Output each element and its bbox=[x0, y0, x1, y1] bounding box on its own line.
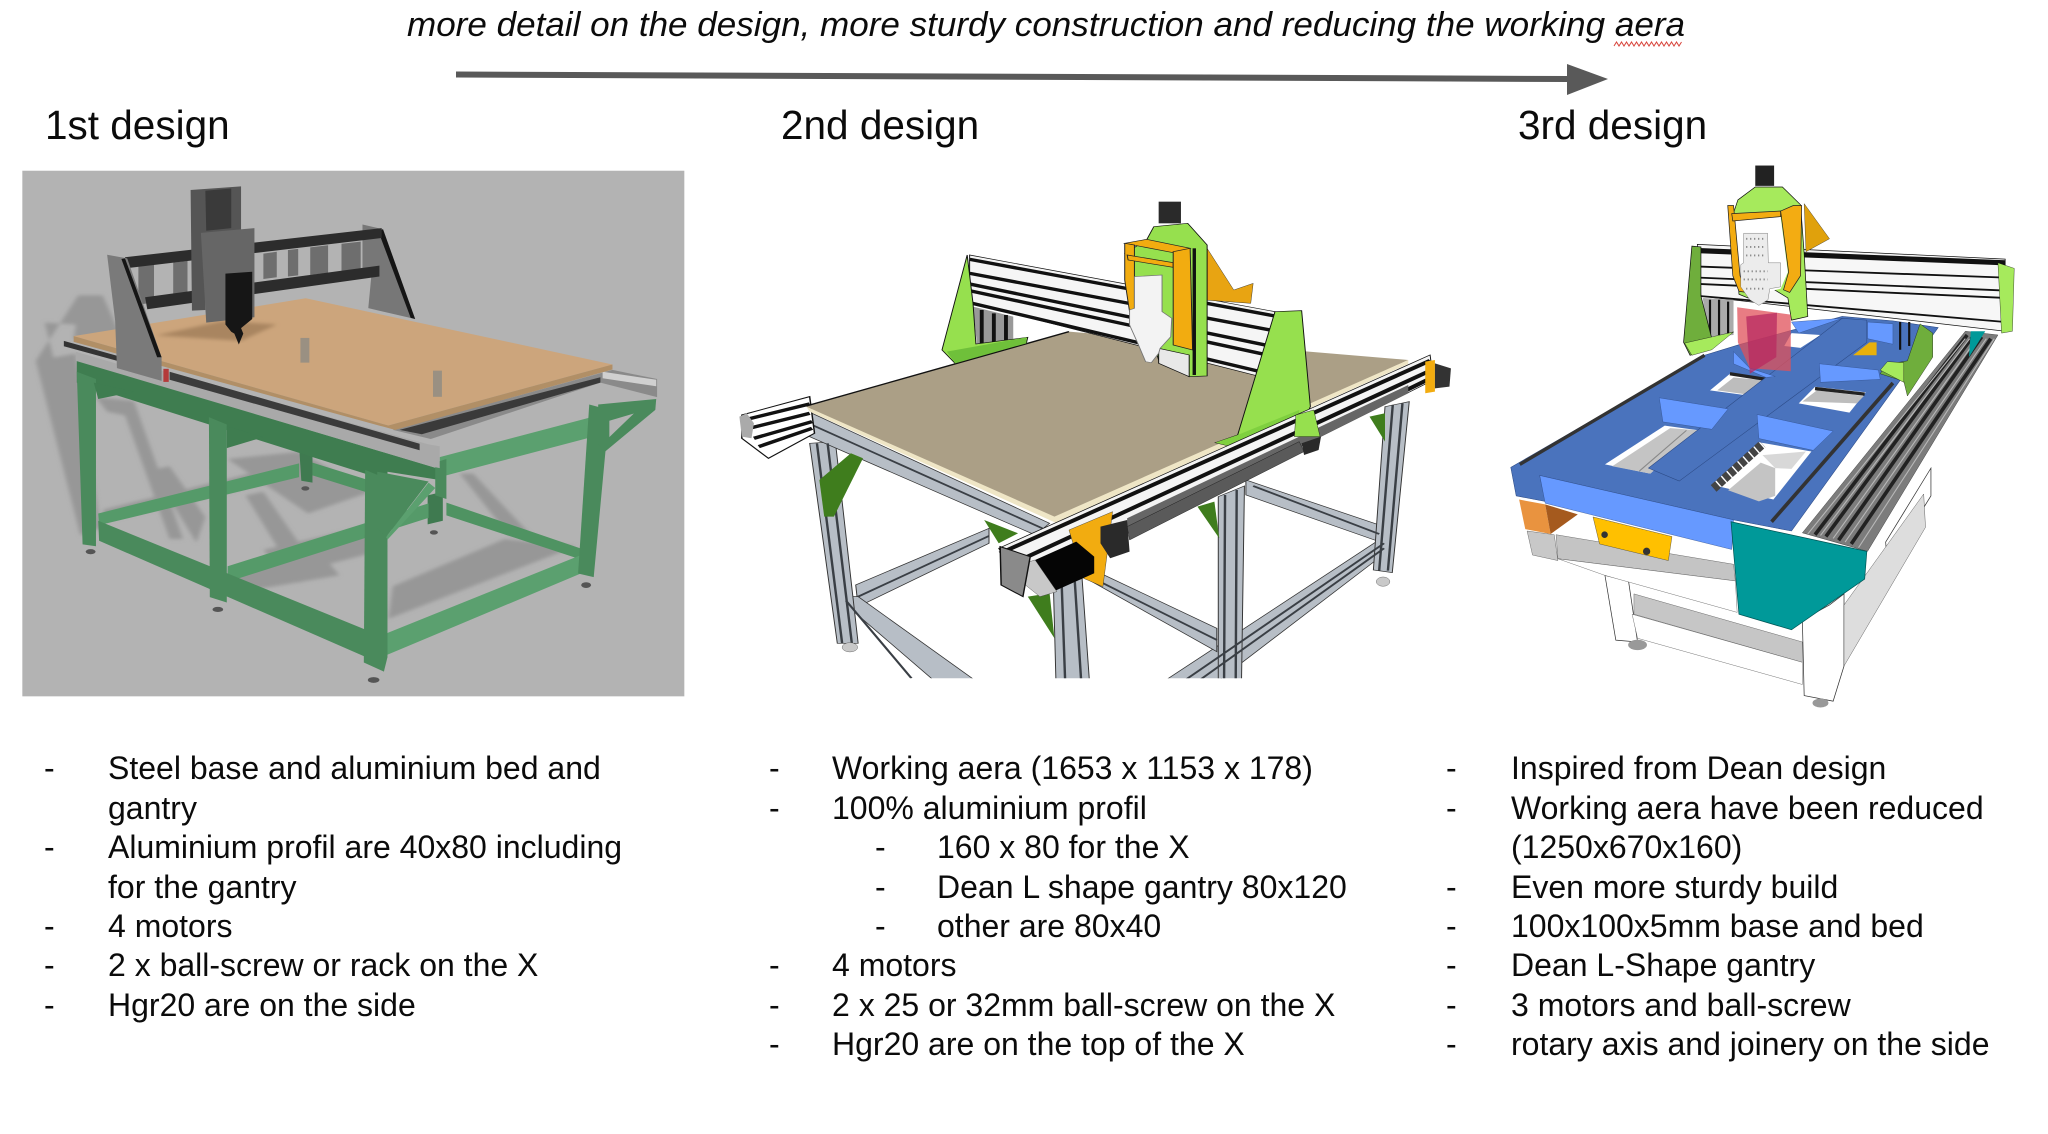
text block: 2nd design specs: - bbox=[769, 790, 780, 826]
Z axis carriage bbox=[201, 228, 254, 323]
X ball screw bbox=[1127, 442, 1304, 540]
Z axis orange back bbox=[1804, 204, 1830, 252]
aluminium legs and cross beams bbox=[810, 402, 1409, 680]
bed clamps bbox=[300, 338, 442, 397]
spindle bbox=[1130, 275, 1172, 363]
front X rail bbox=[998, 354, 1432, 561]
panel: 1st design render bbox=[22, 171, 684, 696]
text block: 2nd design specs: - bbox=[769, 947, 780, 983]
text block: 3rd design specs: - bbox=[1446, 908, 1457, 944]
panel: 3rd design model bbox=[1511, 166, 2014, 707]
text block: 2nd design specs bbox=[769, 750, 1347, 1062]
text block: 2nd design specs: - bbox=[769, 1026, 780, 1062]
arrow: design progression bbox=[456, 64, 1608, 95]
text block: 2nd design specs: 2 x 25 or 32mm ball-screw on the X bbox=[832, 987, 1335, 1023]
steel base: green frame bbox=[77, 360, 656, 672]
text block: 1st design specs bbox=[44, 750, 622, 1023]
text block: 2nd design specs: - bbox=[769, 987, 780, 1023]
left gantry plate bbox=[1684, 246, 1734, 355]
Z motor bbox=[1755, 166, 1774, 186]
render background bbox=[22, 171, 684, 696]
spindle bbox=[1741, 233, 1781, 305]
green corner braces bbox=[819, 413, 1385, 638]
text block: 1st design specs: - bbox=[44, 947, 55, 983]
text block: 3rd design specs: - bbox=[1446, 987, 1457, 1023]
Z axis orange back bbox=[1205, 248, 1253, 303]
text block: 3rd design specs: - bbox=[1446, 750, 1457, 786]
panel: 2nd design model bbox=[739, 202, 1451, 680]
profile slot lines bbox=[812, 403, 1402, 680]
text block: 3rd design specs: Dean L-Shape gantry bbox=[1511, 947, 1815, 983]
text block: 3rd design specs: - bbox=[1446, 790, 1457, 826]
bearing block bbox=[1100, 520, 1130, 558]
text block: 2nd design specs: 4 motors bbox=[832, 947, 956, 983]
Z axis back plate bbox=[191, 186, 241, 311]
Z motor bbox=[1159, 202, 1181, 223]
left end extrusion bbox=[742, 397, 815, 458]
Z axis lower rails bbox=[1159, 348, 1189, 377]
gantry right plate bbox=[362, 225, 415, 319]
far teal plate bbox=[1969, 331, 1985, 357]
text block: 1st design specs: - bbox=[44, 750, 55, 786]
text block: 3rd design specs: (1250x670x160) bbox=[1511, 829, 1742, 865]
yellow motor mount bbox=[1593, 517, 1672, 561]
text block: 2nd design specs: Hgr20 are on the top of the X bbox=[832, 1026, 1245, 1062]
text block: 2nd design specs: Dean L shape gantry 80x120 bbox=[937, 869, 1347, 905]
feet bbox=[1628, 640, 1828, 707]
aluminium side extrusion block bbox=[1802, 331, 1998, 551]
adjustable feet bbox=[86, 486, 591, 683]
gantry rear rail bbox=[970, 255, 1275, 377]
text block: 2nd design specs: 100% aluminium profil bbox=[832, 790, 1147, 826]
spindle dots bbox=[1744, 239, 1768, 289]
text block: 1st design specs: 2 x ball-screw or rack on the X bbox=[108, 947, 538, 983]
rotary axis translucent red zone bbox=[1737, 307, 1791, 374]
text block: 2nd design specs: other are 80x40 bbox=[937, 908, 1161, 944]
text block: 1st design specs: - bbox=[44, 908, 55, 944]
Z axis orange carriage bbox=[1125, 239, 1193, 350]
front orange motor mount bbox=[1069, 512, 1113, 587]
frame openings bbox=[1605, 333, 1877, 501]
heading: 3rd design: 3rd design bbox=[1518, 102, 1707, 148]
gantry rails bbox=[125, 228, 382, 268]
cast shadows bbox=[36, 295, 576, 619]
central blue beam bbox=[1648, 318, 1867, 481]
heading: 2nd design: 2nd design bbox=[781, 102, 979, 148]
text block: 2nd design specs: - bbox=[769, 750, 780, 786]
light blue faces bbox=[1540, 318, 1893, 549]
text block: 2nd design specs: - bbox=[875, 829, 886, 865]
text block: 3rd design specs: - bbox=[1446, 1026, 1457, 1062]
Z axis green body bbox=[1734, 187, 1808, 320]
text block: 3rd design specs: Inspired from Dean design bbox=[1511, 750, 1886, 786]
Z axis green plate bbox=[1125, 223, 1207, 377]
orange corner block bbox=[1519, 500, 1551, 534]
gantry left plate bbox=[107, 255, 162, 381]
text block: 3rd design specs: - bbox=[1446, 869, 1457, 905]
right X motor mount bbox=[1425, 360, 1435, 393]
linear rails on frame bbox=[1520, 355, 1705, 464]
text block: 1st design specs: - bbox=[44, 987, 55, 1023]
Z axis opening bbox=[1734, 217, 1788, 296]
text block: 1st design specs: Aluminium profil are 40x80 including bbox=[108, 829, 622, 865]
text block: 2nd design specs: - bbox=[875, 908, 886, 944]
Z axis orange carriage bbox=[1728, 205, 1802, 292]
text block: 3rd design specs bbox=[1446, 750, 1989, 1062]
wooden bed top bbox=[74, 298, 612, 426]
gantry foot clamp bbox=[1294, 410, 1320, 437]
side linear rail bbox=[64, 341, 120, 362]
text block: 3rd design specs: - bbox=[1446, 947, 1457, 983]
heading: 1st design: 1st design bbox=[45, 102, 230, 148]
rotary joinery teal plate bbox=[1731, 522, 1867, 630]
text block: 2nd design specs: 160 x 80 for the X bbox=[937, 829, 1190, 865]
text block: 2nd design specs: Working aera (1653 x 1153 x 178) bbox=[832, 750, 1313, 786]
white base legs and lower frame bbox=[1605, 468, 1931, 701]
bed board bbox=[806, 332, 1408, 522]
front X motor bbox=[1035, 542, 1094, 591]
right gantry plate bbox=[1215, 311, 1310, 451]
text block: 1st design specs: gantry bbox=[108, 790, 197, 826]
aluminium bed extrusions bbox=[76, 352, 440, 468]
left gantry plate bbox=[942, 255, 1028, 363]
text block: 3rd design specs: rotary axis and joinery on the side bbox=[1511, 1026, 1989, 1062]
text block: 1st design specs: - bbox=[44, 829, 55, 865]
gantry rail bbox=[1697, 244, 2005, 331]
gantry rear profiles bbox=[138, 242, 361, 304]
text block: 1st design specs: 4 motors bbox=[108, 908, 232, 944]
right gantry plate bbox=[1880, 324, 1933, 396]
text block: 3rd design specs: 100x100x5mm base and bed bbox=[1511, 908, 1924, 944]
text block: 1st design specs: Hgr20 are on the side bbox=[108, 987, 416, 1023]
blue steel frame base bbox=[1511, 316, 1938, 531]
right gantry end bbox=[1998, 263, 2014, 333]
text block: 3rd design specs: 3 motors and ball-screw bbox=[1511, 987, 1852, 1023]
spindle bbox=[225, 272, 252, 344]
text block: 3rd design specs: Even more sturdy build bbox=[1511, 869, 1838, 905]
text block: 2nd design specs: - bbox=[875, 869, 886, 905]
text block: 1st design specs: for the gantry bbox=[108, 869, 297, 905]
title: evolution summary: more detail on the design, more sturdy construction and reducing the working aera bbox=[407, 6, 1685, 44]
feet bbox=[842, 577, 1390, 652]
text block: 1st design specs: Steel base and aluminium bed and bbox=[108, 750, 601, 786]
text block: 3rd design specs: Working aera have been reduced bbox=[1511, 790, 1984, 826]
